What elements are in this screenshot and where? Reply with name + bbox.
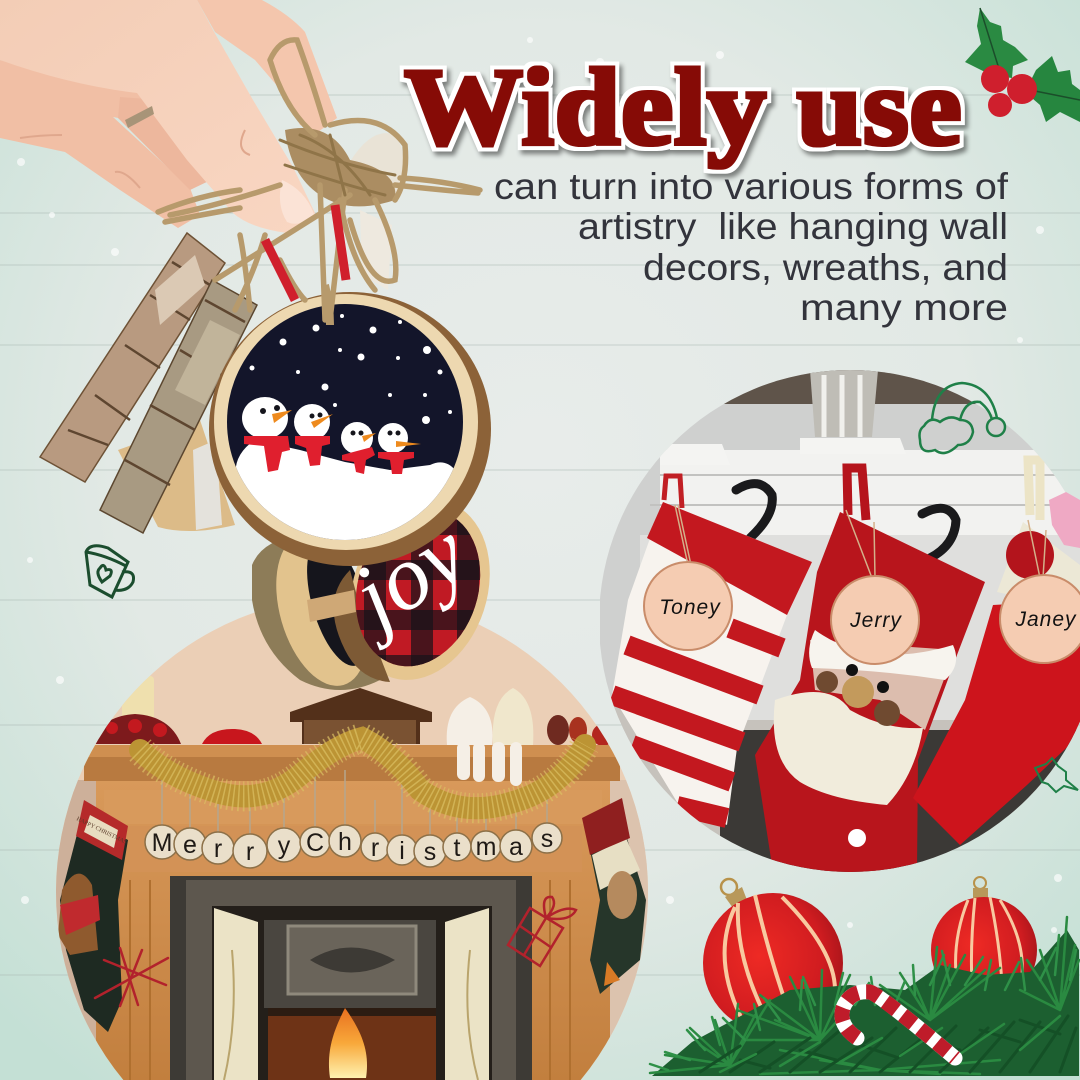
Merry Christmas wood slices: s xyxy=(424,838,436,866)
icon: gift outline xyxy=(508,897,576,966)
left stocking xyxy=(58,800,128,1032)
Merry Christmas wood slices: y xyxy=(278,832,291,860)
right circle photo: stockings xyxy=(600,370,1080,872)
name tags: Toney xyxy=(659,596,721,619)
hand holding twine xyxy=(0,0,337,233)
Merry Christmas wood slices: r xyxy=(246,838,254,866)
Merry Christmas wood slices: i xyxy=(399,837,405,865)
candy cane xyxy=(842,992,955,1058)
name tags: Janey xyxy=(1014,608,1077,631)
name tags: Jerry xyxy=(849,609,902,632)
subtitle text block: decors, wreaths, and xyxy=(643,247,1008,288)
pink flower xyxy=(1049,492,1080,548)
Merry Christmas wood slices: t xyxy=(454,834,461,862)
mantel ornaments row xyxy=(92,676,614,746)
name tags xyxy=(644,562,1080,664)
stocking: Santa xyxy=(755,512,985,872)
icon: red starburst xyxy=(95,948,168,1006)
Merry Christmas wood slices: M xyxy=(152,829,172,857)
pine branches xyxy=(650,917,1079,1076)
gold tinsel garland xyxy=(140,738,585,808)
icon: holly leaf outline xyxy=(1035,758,1078,792)
red ornament balls xyxy=(703,877,1037,1033)
red ribbon xyxy=(265,205,346,300)
Merry Christmas wood slices xyxy=(145,823,562,868)
snowman ornament xyxy=(209,292,491,566)
white mantel moulding xyxy=(640,370,1080,872)
Merry Christmas wood slices: m xyxy=(476,833,496,861)
black hooks xyxy=(736,484,956,558)
title: Widely use xyxy=(404,46,962,168)
icon: coffee cup xyxy=(86,546,134,597)
snowman dolls on mantel xyxy=(447,688,533,786)
right stocking xyxy=(582,798,646,994)
Merry Christmas wood slices: s xyxy=(541,825,553,853)
joy ornament: joy xyxy=(326,501,484,652)
mantel and surround xyxy=(78,745,626,1080)
Merry Christmas wood slices: r xyxy=(371,834,379,862)
stocking: striped xyxy=(612,502,812,825)
left circle photo: fireplace mantel xyxy=(56,596,648,1080)
twine bow xyxy=(158,40,480,320)
Merry Christmas wood slices: h xyxy=(338,828,352,856)
back wood slice xyxy=(118,420,235,531)
Merry Christmas wood slices: r xyxy=(214,835,222,863)
Merry Christmas wood slices: e xyxy=(183,831,197,859)
left stocking: HAPPY CHRISTMAS xyxy=(75,816,128,846)
icon: holly top right xyxy=(965,8,1080,122)
subtitle text block: can turn into various forms of xyxy=(494,166,1009,207)
Merry Christmas wood slices: C xyxy=(306,829,324,857)
bark slices xyxy=(40,233,257,533)
ribbons and strings xyxy=(664,460,1046,578)
Merry Christmas wood slices: a xyxy=(509,833,523,861)
stocking: cable knit red xyxy=(913,522,1080,845)
icon: santa hat outline xyxy=(920,383,1005,453)
hanging strings xyxy=(161,770,548,834)
subtitle text block: artistry like hanging wall xyxy=(578,206,1008,247)
subtitle text block xyxy=(494,166,1009,328)
subtitle text block: many more xyxy=(800,287,1008,328)
joy ornament xyxy=(252,510,490,690)
